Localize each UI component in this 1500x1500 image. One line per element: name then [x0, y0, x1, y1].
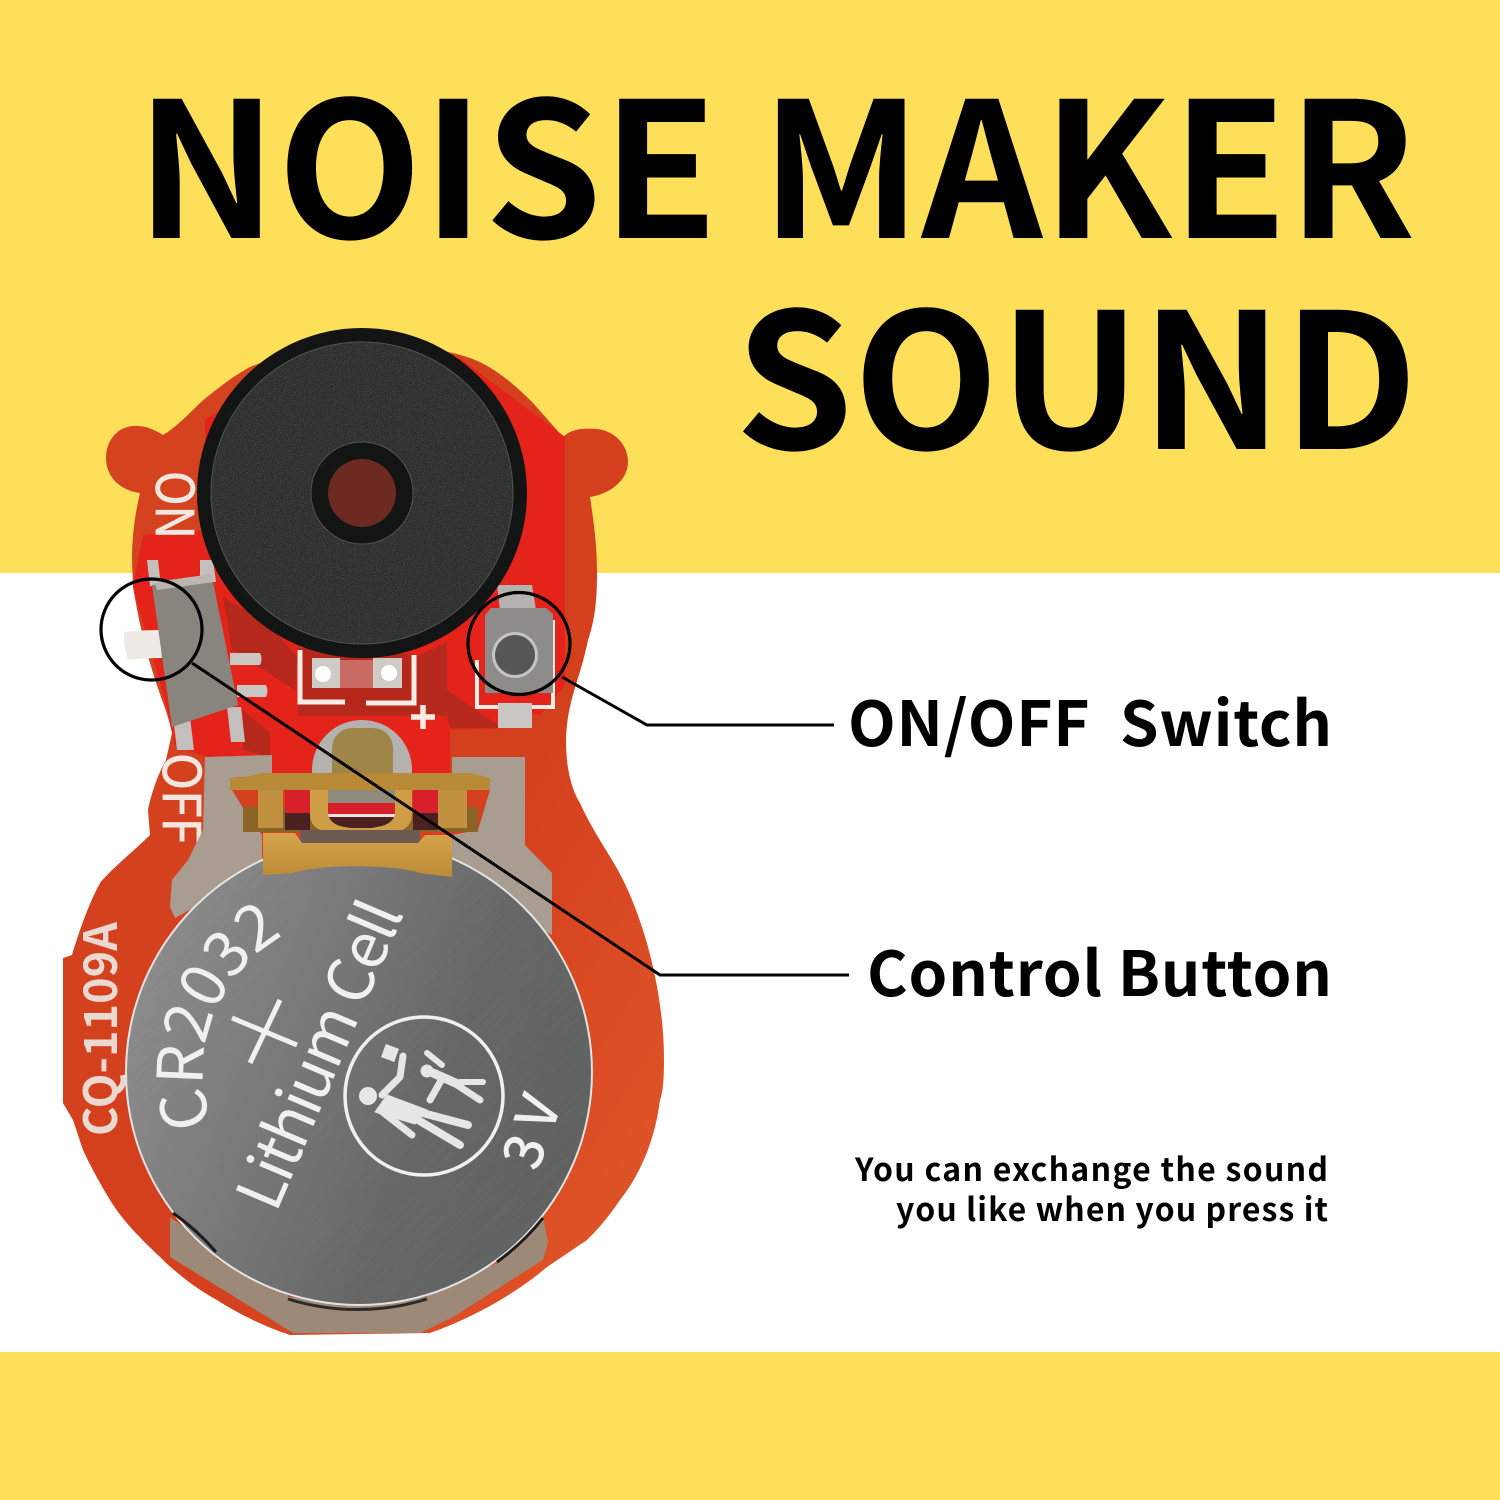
product photo: noise maker circuit board	[63, 328, 664, 1335]
silkscreen label: CQ-1109A: CQ-1109A	[65, 922, 131, 1136]
title	[136, 21, 1418, 504]
battery text: CR2032: CR2032	[156, 905, 281, 1128]
coin cell battery	[125, 857, 593, 1311]
label: ON/OFF Switch: ON/OFF Switch	[848, 674, 1332, 764]
slide switch	[124, 560, 267, 750]
dark traces	[223, 597, 502, 757]
label: Control Button: Control Button	[867, 924, 1332, 1014]
note text: You can exchange the sound	[854, 1145, 1328, 1191]
battery holder: top tabs	[170, 755, 272, 918]
callout: switch ring and leader	[101, 579, 849, 975]
bright red copper area	[133, 358, 565, 775]
yellow footer band	[0, 1352, 1500, 1500]
buzzer	[197, 328, 527, 658]
bright pad beside button	[448, 622, 497, 725]
title: SOUND	[735, 232, 1418, 504]
gold battery clip	[230, 773, 490, 877]
note text	[854, 1145, 1328, 1231]
yellow header band	[0, 0, 1500, 573]
battery plus mark	[232, 1000, 297, 1063]
red circuit board outline	[63, 347, 664, 1335]
battery safety icon	[345, 1017, 503, 1175]
tactile control button	[477, 585, 553, 728]
center contact rivet	[312, 720, 412, 820]
callout: button ring and leader	[468, 592, 834, 725]
silkscreen label: ON: ON	[141, 471, 216, 539]
note text: you like when you press it	[896, 1185, 1328, 1231]
battery text: Lithium Cell: Lithium Cell	[210, 885, 421, 1221]
battery holder: bottom clip	[170, 1217, 548, 1333]
title: NOISE MAKER	[136, 21, 1416, 293]
capacitor pads	[300, 650, 435, 729]
silkscreen label: OFF: OFF	[148, 753, 223, 845]
battery text: 3V: 3V	[478, 1082, 577, 1177]
